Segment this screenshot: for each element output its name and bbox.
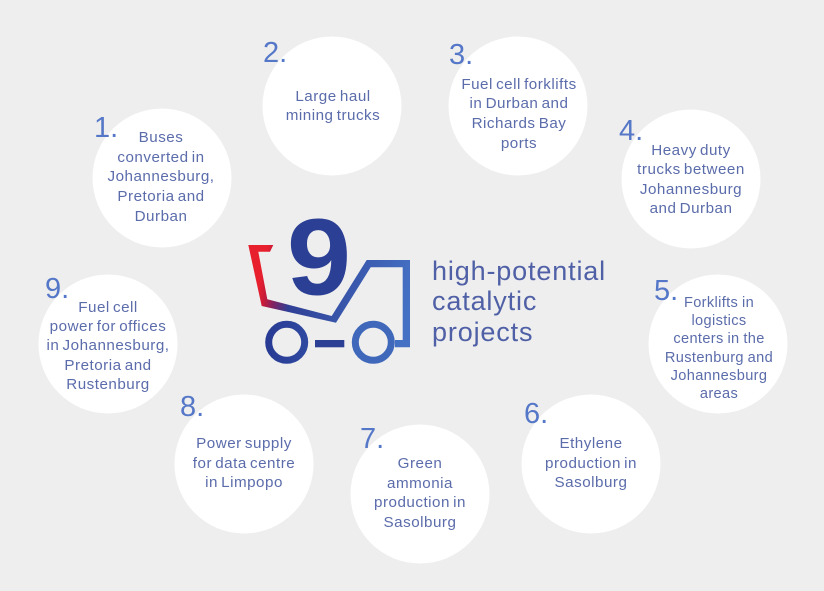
project 9: in Johannesburg, — [46, 337, 170, 354]
icon: forklift frame — [248, 245, 410, 347]
project 2: mining trucks — [286, 107, 380, 124]
project 1 — [92, 108, 232, 248]
project 5: Forklifts in — [684, 295, 754, 311]
heading: projects — [432, 317, 533, 347]
project 9: Pretoria and — [64, 357, 152, 374]
project 6: Sasolburg — [555, 474, 627, 491]
heading: high-potential — [432, 256, 606, 286]
project 9 — [38, 273, 178, 414]
project 1: Johannesburg, — [108, 168, 214, 185]
project 6: 6. — [524, 398, 548, 430]
project 9: power for offices — [50, 318, 166, 335]
project 3 — [448, 36, 588, 176]
project 4: Heavy duty — [651, 142, 731, 159]
project 7: 7. — [360, 423, 384, 455]
project 8: for data centre — [193, 455, 295, 472]
project 1: Durban — [135, 208, 187, 225]
project 8: in Limpopo — [205, 474, 283, 491]
project 7 — [350, 423, 490, 564]
project 5: Rustenburg and — [665, 350, 773, 366]
project 9: Fuel cell — [78, 299, 138, 316]
project 2 — [262, 36, 402, 176]
project 5: Johannesburg — [671, 368, 767, 384]
project 8: 8. — [180, 391, 204, 423]
project 1: Buses — [139, 129, 183, 146]
project 3: in Durban and — [470, 95, 568, 112]
project 3: 3. — [449, 39, 473, 71]
project 7: production in — [374, 494, 466, 511]
project 3: Richards Bay — [472, 115, 566, 132]
project 7: Sasolburg — [384, 514, 456, 531]
project 9: Rustenburg — [66, 376, 150, 393]
project 2: 2. — [263, 37, 287, 69]
project 3: Fuel cell forklifts — [461, 76, 577, 93]
project 8 — [174, 391, 314, 534]
project 4: Johannesburg — [640, 181, 742, 198]
icon: forklift wheels and axle — [269, 324, 391, 360]
project 6: Ethylene — [559, 435, 623, 452]
project 5: centers in the — [673, 331, 765, 347]
project 3: ports — [501, 135, 537, 152]
project 7: ammonia — [387, 475, 453, 492]
project 5: 5. — [654, 275, 678, 307]
project 4: trucks between — [637, 161, 745, 178]
central forklift icon with 9 — [248, 196, 410, 360]
project 5: areas — [700, 386, 738, 402]
project 1: 1. — [94, 112, 118, 144]
project 5 — [648, 274, 788, 414]
project 9: 9. — [45, 273, 69, 305]
project 8: Power supply — [196, 435, 292, 452]
heading — [432, 256, 606, 347]
heading: catalytic — [432, 286, 537, 316]
project 4 — [619, 110, 760, 248]
project 1: Pretoria and — [117, 188, 205, 205]
big number 9: 9 — [287, 196, 351, 318]
project 6 — [522, 394, 660, 534]
project 4: and Durban — [650, 200, 732, 217]
project 4: 4. — [619, 115, 643, 147]
project 6: production in — [545, 455, 637, 472]
project 5: logistics — [691, 313, 747, 329]
project 7: Green — [398, 455, 442, 472]
project 2: Large haul — [295, 88, 371, 105]
project 1: converted in — [117, 149, 205, 166]
